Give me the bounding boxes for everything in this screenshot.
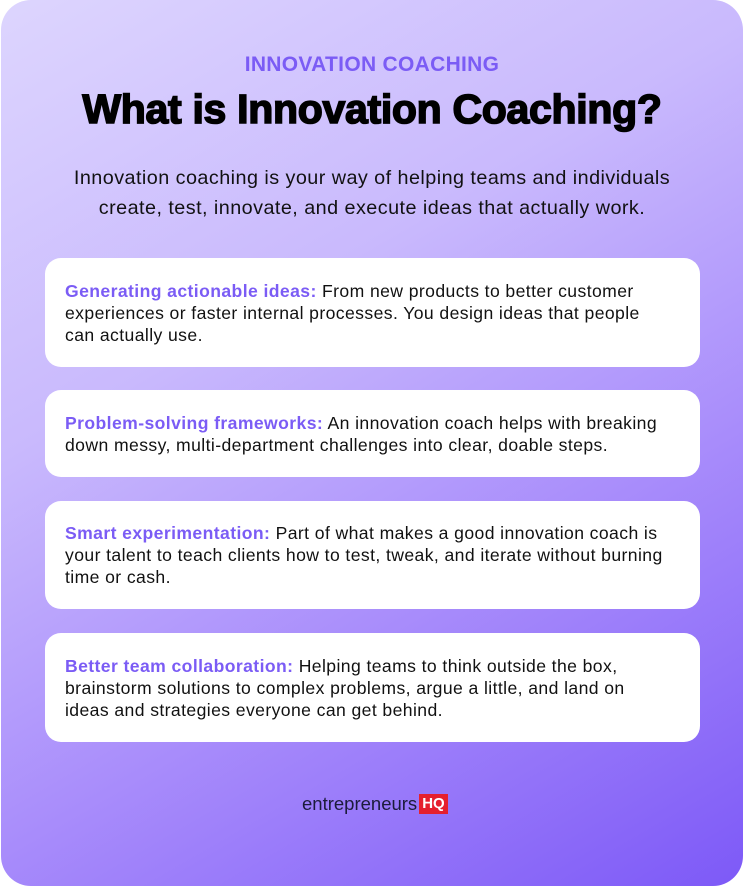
card: generating actionable ideas [45,258,700,367]
card: smart experimentation: your talent to teach clients how to test, tweak, and iterate without burning [65,545,663,565]
card: generating actionable ideas: can actually use. [65,324,203,344]
subtitle: Innovation coaching is your way of helping teams and individuals [74,167,670,189]
title: What is Innovation Coaching? [82,86,662,132]
subtitle [74,167,670,219]
card: better team collaboration: Better team collaboration: Helping teams to think outside the box, [65,656,617,676]
kicker: INNOVATION COACHING [245,53,499,76]
logo: entrepreneurs [302,793,417,814]
card: smart experimentation [45,501,700,609]
card: problem-solving frameworks: Problem-solving frameworks: An innovation coach helps with breaking [65,412,657,432]
card: problem-solving frameworks [45,390,700,477]
card: better team collaboration [45,633,700,742]
card: smart experimentation: Smart experimentation: Part of what makes a good innovation coach is [65,523,657,543]
card: generating actionable ideas: experiences or faster internal processes. You design ideas that people [65,302,640,322]
subtitle: create, test, innovate, and execute ideas that actually work. [99,197,645,219]
logo: HQ [422,795,445,812]
card: problem-solving frameworks: down messy, multi-department challenges into clear, doable steps. [65,434,608,454]
card: better team collaboration: ideas and strategies everyone can get behind. [65,700,443,720]
card: generating actionable ideas: Generating actionable ideas: From new products to better customer [65,280,634,300]
card: better team collaboration: brainstorm solutions to complex problems, argue a little, and land on [65,678,625,698]
card: smart experimentation: time or cash. [65,567,171,587]
